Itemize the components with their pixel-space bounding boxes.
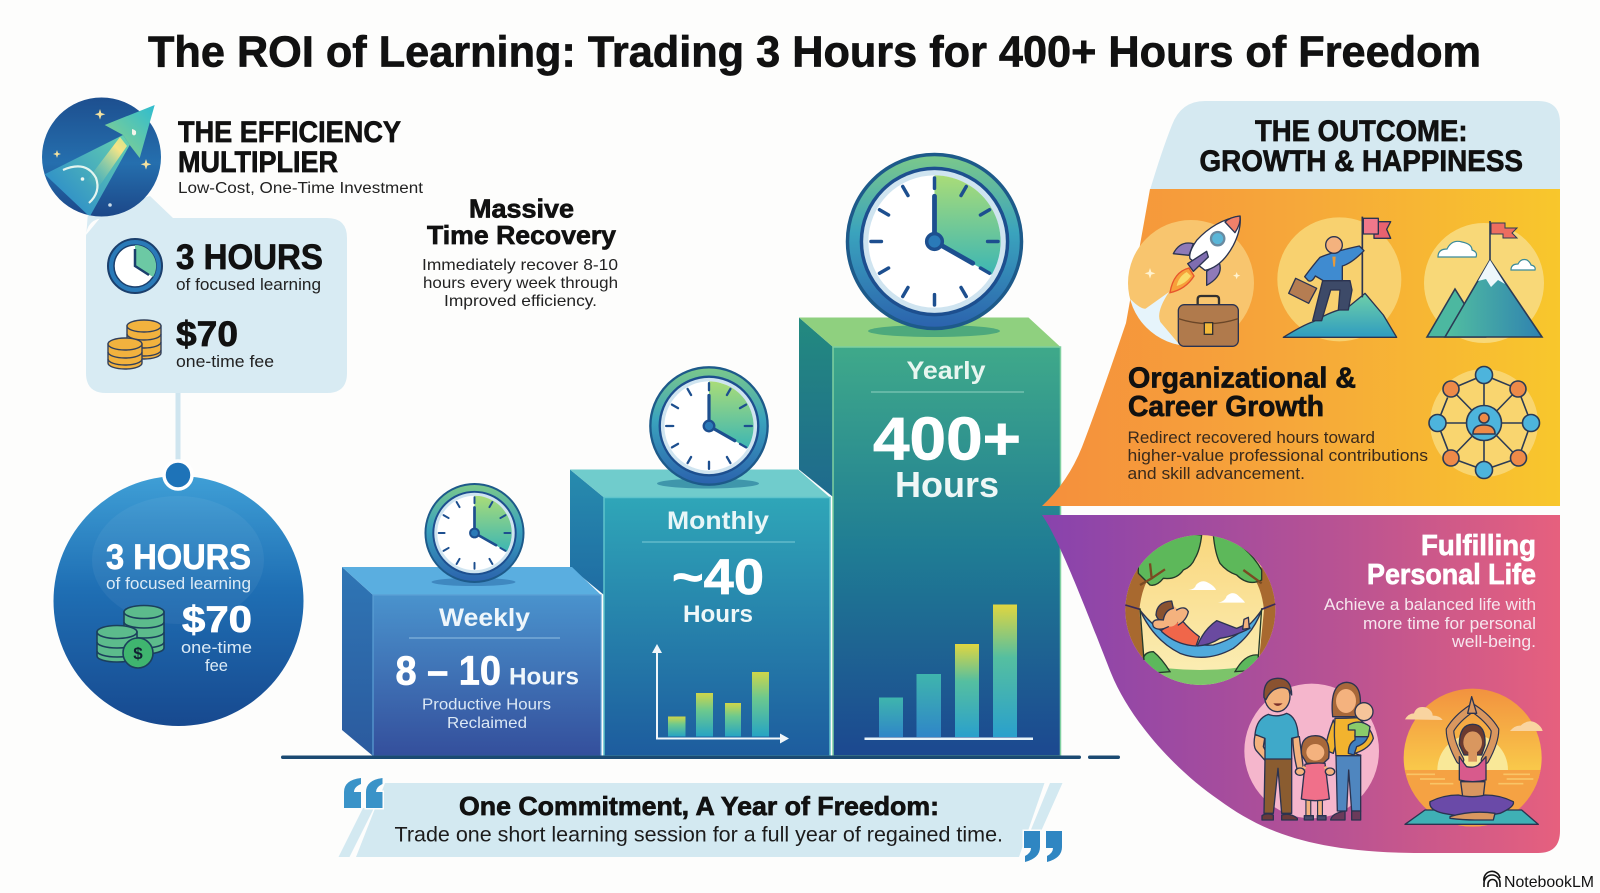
icon: climber on peak [1277,217,1401,341]
heading: Organizational & [1128,362,1356,394]
value [672,549,764,628]
caption: Reclaimed [447,715,527,732]
icon: rocket arrow badge [42,98,161,217]
staircase chart [281,154,1120,759]
value [873,406,1021,505]
text: fee: one-time fee [176,352,274,371]
body text: well-being. [1451,633,1536,651]
subheading: Low-Cost, One-Time Investment [178,180,424,197]
text: 3 hours [176,238,323,294]
text: massive time recovery [422,194,618,310]
value: Hours [895,464,999,505]
title: The ROI of Learning: Trading 3 Hours for 400+ Hours of Freedom [148,28,1481,76]
body text [1128,429,1428,483]
text: 3 hours: 3 HOURS [176,238,323,277]
heading [178,116,401,179]
icon: rocket and briefcase [1128,216,1254,346]
text: massive time recovery: Massive [469,194,574,224]
outcome header: THE OUTCOME: [1255,115,1468,148]
callout: commitment quote [338,778,1062,862]
heading [1128,362,1356,423]
heading: THE EFFICIENCY [178,116,401,149]
text: massive time recovery: Improved efficiency. [444,293,597,310]
bar chart: yearly [864,604,1033,740]
body text: Achieve a balanced life with [1324,596,1536,614]
icon: family [1244,678,1379,820]
heading: MULTIPLIER [178,146,338,179]
icon: yoga at sunset [1400,689,1547,827]
girl [1295,736,1335,820]
text: fee [181,599,252,675]
icon: open quote [344,778,382,808]
icon: gold coins [108,320,161,369]
panel: the outcome [1042,101,1560,853]
baby [1348,703,1373,755]
body text: and skill advancement. [1128,465,1305,483]
value: ~40 [672,549,764,605]
text: Trade one short learning session for a full year of regained time. [394,824,1003,846]
text: massive time recovery: hours every week through [423,275,618,292]
quote band [338,783,1062,857]
body text: more time for personal [1363,615,1536,633]
heading [1367,530,1536,591]
heading: Personal Life [1367,559,1536,591]
text: fee: one-time [181,638,252,657]
icon: medium clock [650,367,768,485]
label: Yearly [906,357,986,385]
connector line [176,390,180,460]
icon: green coins [97,606,164,668]
icon: small clock [425,484,524,582]
outcome header: GROWTH & HAPPINESS [1200,145,1523,178]
value: 400+ [873,406,1021,472]
body text [1324,596,1536,651]
watermark: NotebookLM: NotebookLM [1504,874,1594,891]
outcome header [1150,101,1560,190]
body text: higher-value professional contributions [1128,447,1428,465]
baseline [281,756,1120,759]
connector dot [164,461,192,489]
text: 3 hours [106,538,251,593]
woman [1325,682,1373,820]
step: yearly [799,154,1060,756]
value: Hours [683,601,753,628]
text: 3 hours: of focused learning [176,275,321,294]
clock shadow [432,578,516,586]
icon: small clock [108,239,162,293]
heading: Fulfilling [1421,530,1536,562]
text: 3 hours: of focused learning [106,574,251,593]
text: massive time recovery: Time Recovery [427,220,617,250]
step: weekly [342,484,601,756]
caption: Productive Hours [422,696,551,714]
icon: hammock [1123,533,1277,690]
text: massive time recovery: Immediately recover 8-10 [422,257,618,274]
icon: large clock [847,154,1022,329]
text: fee: $70 [182,599,252,640]
icon: close quote [1024,831,1062,862]
text: 3 hours: 3 HOURS [106,538,251,577]
label: Monthly [667,507,769,535]
heading: Career Growth [1128,391,1324,423]
blue summary circle [54,461,304,726]
text [394,791,1003,846]
panel: efficiency multiplier [42,98,424,726]
value: 8 – 10 [396,648,501,694]
value: Hours [509,664,579,690]
text: One Commitment, A Year of Freedom: [459,791,939,821]
panel: career growth [1042,189,1560,506]
clock shadow [657,478,759,488]
value [396,648,579,694]
step: monthly [570,367,830,756]
man [1254,678,1303,820]
text: fee: $70 [176,315,238,354]
investment card [86,196,347,393]
body text: Redirect recovered hours toward [1128,429,1375,447]
clock shadow [868,325,1000,337]
text: fee: fee [205,656,228,675]
label: Weekly [439,604,530,632]
text: fee [176,315,274,371]
caption [422,696,551,732]
icon: network [1429,366,1540,478]
icon: green coins: $ [133,644,143,663]
panel: personal life [1042,515,1560,853]
icon: summit mountains [1424,221,1544,343]
bar chart: monthly [652,644,789,744]
